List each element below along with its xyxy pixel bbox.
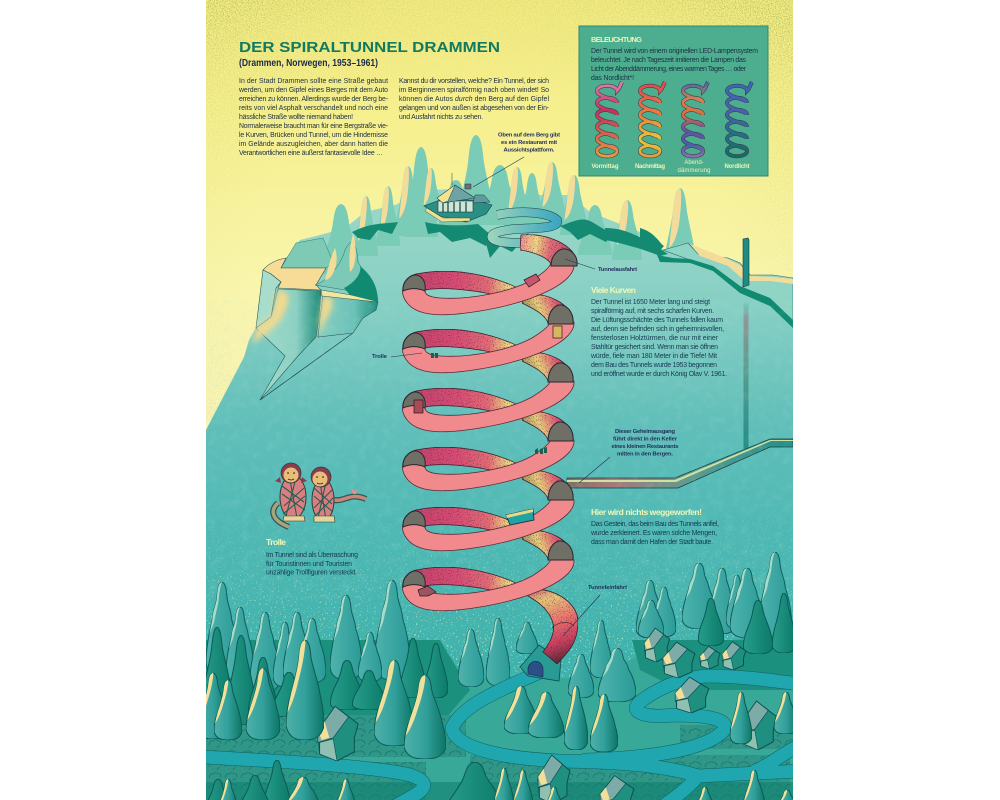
text block: Viele Kurven: auf, denn sie befinden sich in geheimnisvollen, [591, 326, 724, 333]
intro text column 1: reits von viel Asphalt verschandelt und noch eine [239, 105, 388, 112]
callout: secret exit: eines kleinen Restaurants [612, 444, 678, 450]
text block: Hier wird nichts weggeworfen: dass man damit den Hafen der Stadt baute. [591, 539, 713, 546]
callout: secret exit: führt direkt in den Keller [613, 436, 678, 442]
LED coil: Nordlicht [727, 82, 752, 156]
intro text column 2: können die Autos durch den Berg auf den Gipfel [399, 96, 549, 103]
intro text column 1: Verantwortlichen eine äußerst fantasievolle Idee … [239, 150, 383, 157]
right spire [666, 188, 694, 250]
callout: Tunnelausfahrt [565, 259, 637, 273]
panel text: beleuchtet. Je nach Tageszeit imitieren die Lampen das [591, 57, 747, 64]
troll 1 [273, 463, 307, 527]
intro text column 2: gelangen und von außen ist abgesehen von der Ein- [399, 105, 549, 112]
intro text column 1: le Kurven, Brücken und Tunnel, um die Hindernisse [239, 132, 388, 139]
callout: Tunnelausfahrt: Tunnelausfahrt [598, 267, 637, 273]
text block: Viele Kurven: dem Bau des Tunnels wurde 1953 begonnen [591, 362, 717, 369]
callout: secret exit: mitten in den Bergen. [617, 452, 673, 458]
text block: Viele Kurven: Die Lüftungsschächte des Tunnels fallen kaum [591, 317, 723, 324]
intro text column 2: Kannst du dir vorstellen, welche? Ein Tunnel, der sich [399, 78, 549, 85]
tunnel turn 5 [403, 498, 574, 560]
poster background: yellow sky [206, 0, 793, 430]
title: DER SPIRALTUNNEL DRAMMEN [239, 39, 500, 56]
foreground trees [198, 640, 798, 759]
middle row of trees, left [202, 627, 448, 725]
intro text column 1 [238, 78, 388, 157]
callout: secret exit [579, 429, 678, 483]
dark ridge patches [352, 219, 668, 258]
cliff at left of the mountain [252, 234, 378, 400]
intro text column 1: hässliche Straße wollte niemand haben! [239, 114, 353, 121]
intro text column 2: und Ausfahrt nichts zu sehen. [399, 114, 483, 121]
text block: Viele Kurven: spiralförmig auf, mit sechs scharfen Kurven. [591, 308, 714, 315]
tunnel turn 6 with entrance arc [403, 558, 578, 664]
panel heading: BELEUCHTUNG [591, 35, 642, 44]
small trees by the tunnel entrance [458, 618, 636, 702]
callout: Trolle: Trolle [372, 354, 388, 360]
LED coil: Abenddämmerung [683, 82, 708, 156]
text block: Viele Kurven: würde, fiele man 180 Meter in die Tiefe! Mit [590, 353, 717, 360]
stippled sky edges [206, 0, 793, 420]
intro text column 2 [399, 78, 549, 121]
mountain ridge spires [322, 135, 642, 274]
callout: Trolle [372, 353, 422, 360]
surface mottling [206, 300, 793, 600]
secret passage tunnel [567, 439, 793, 488]
road surface [492, 212, 557, 243]
callout: Tunneleinfahrt [563, 585, 627, 636]
tunnel turn 4 [403, 438, 574, 500]
intro text column 1: erreichen zu können. Allerdings wurde der Berg be- [239, 96, 388, 103]
road to the summit [492, 212, 557, 243]
text block: Viele Kurven: Der Tunnel ist 1650 Meter lang und steigt [591, 299, 710, 306]
tunnel turn 2 [403, 320, 574, 382]
top tunnel arc to the exit [520, 235, 577, 266]
text block: Hier wird nichts weggeworfen: wurde zerkleinert. Es waren solche Mengen, [590, 530, 717, 537]
bottom row of trees [204, 760, 798, 800]
coil captions: Nordlicht [724, 164, 750, 170]
trolls illustration [273, 463, 366, 527]
callout: secret exit: Dieser Geheimausgang [615, 429, 675, 435]
mountain body [206, 188, 793, 680]
intro text column 2: im Berginneren spiralförmig nach oben windet! So [399, 87, 549, 94]
restaurant on the summit [424, 173, 492, 222]
pale speckle in lower sky of the valley [206, 494, 793, 678]
text block: Viele Kurven: fensterlosen Holztürmen, die nur mit einer [591, 335, 719, 342]
text block: Viele Kurven: und eröffnet wurde er durch König Olav V. 1961. [591, 371, 727, 378]
callout: Tunneleinfahrt: Tunneleinfahrt [588, 585, 627, 591]
forest ground [206, 630, 793, 800]
panel text [591, 48, 758, 82]
panel: Beleuchtung [579, 26, 768, 176]
vehicles in the tunnel [414, 274, 562, 596]
LED coil: Vormittag [597, 82, 622, 156]
callout: restaurant [473, 132, 560, 187]
intro text column 1: Normalerweise braucht man für eine Bergstraße vie- [239, 123, 388, 130]
back row of trees, left [206, 580, 410, 692]
callout: restaurant: es ein Restaurant mit [501, 140, 557, 146]
panel text: Der Tunnel wird von einem originellen LED-Lampensystem [591, 48, 758, 55]
tunnel turn 1 [403, 262, 574, 324]
text block: Viele Kurven [590, 285, 727, 378]
intro text column 1: In der Stadt Drammen sollte eine Straße gebaut [239, 78, 388, 85]
houses in the valley [318, 628, 777, 800]
intro text column 1: im Gelände auszugleichen, aber dann hatten die [239, 141, 388, 148]
LED coil: Nachmittag [640, 82, 665, 156]
tunnel gatehouse [520, 645, 561, 681]
spiral tunnel [403, 235, 578, 664]
text block: Viele Kurven: Stahltür gesichert sind. Wenn man sie öffnen [591, 344, 718, 351]
text block: Trolle [266, 537, 358, 576]
text block: Hier wird nichts weggeworfen: Das Gestein, das beim Bau des Tunnels anfiel, [591, 521, 719, 528]
panel text: Licht der Abenddämmerung, eines warmen Tages … oder [591, 66, 747, 73]
text block: Hier wird nichts weggeworfen [590, 507, 719, 546]
back row of trees, right [636, 552, 796, 654]
text block: Trolle: Trolle [266, 537, 286, 547]
panel text: das Nordlicht*! [591, 75, 634, 82]
callout: restaurant: Aussichtsplattform. [504, 148, 555, 154]
text block: Hier wird nichts weggeworfen: Hier wird nichts weggeworfen! [591, 507, 702, 517]
text block: Viele Kurven: Viele Kurven [591, 285, 636, 295]
right shoulder with dark band [657, 243, 793, 328]
text block: Trolle: Im Tunnel sind als Überraschung [266, 551, 358, 559]
coil captions: Abend- [684, 160, 704, 166]
coil captions: Vormittag [592, 164, 619, 170]
subtitle: (Drammen, Norwegen, 1953–1961) [239, 58, 378, 69]
ventilation shaft [743, 238, 749, 452]
troll 2 [311, 467, 366, 522]
text block: Trolle: für Touristinnen und Touristen [266, 561, 352, 568]
tunnel turn 3 [403, 379, 574, 441]
roads in the valley [204, 672, 800, 800]
text block: Trolle: unzählige Trollfiguren versteckt. [266, 570, 357, 576]
callout: restaurant: Oben auf dem Berg gibt [498, 132, 560, 138]
coil captions [592, 160, 750, 174]
coil captions: Nachmittag [635, 164, 665, 170]
coil captions: dämmerung [678, 168, 710, 174]
intro text column 1: werden, um den Gipfel eines Berges mit dem Auto [238, 87, 388, 94]
